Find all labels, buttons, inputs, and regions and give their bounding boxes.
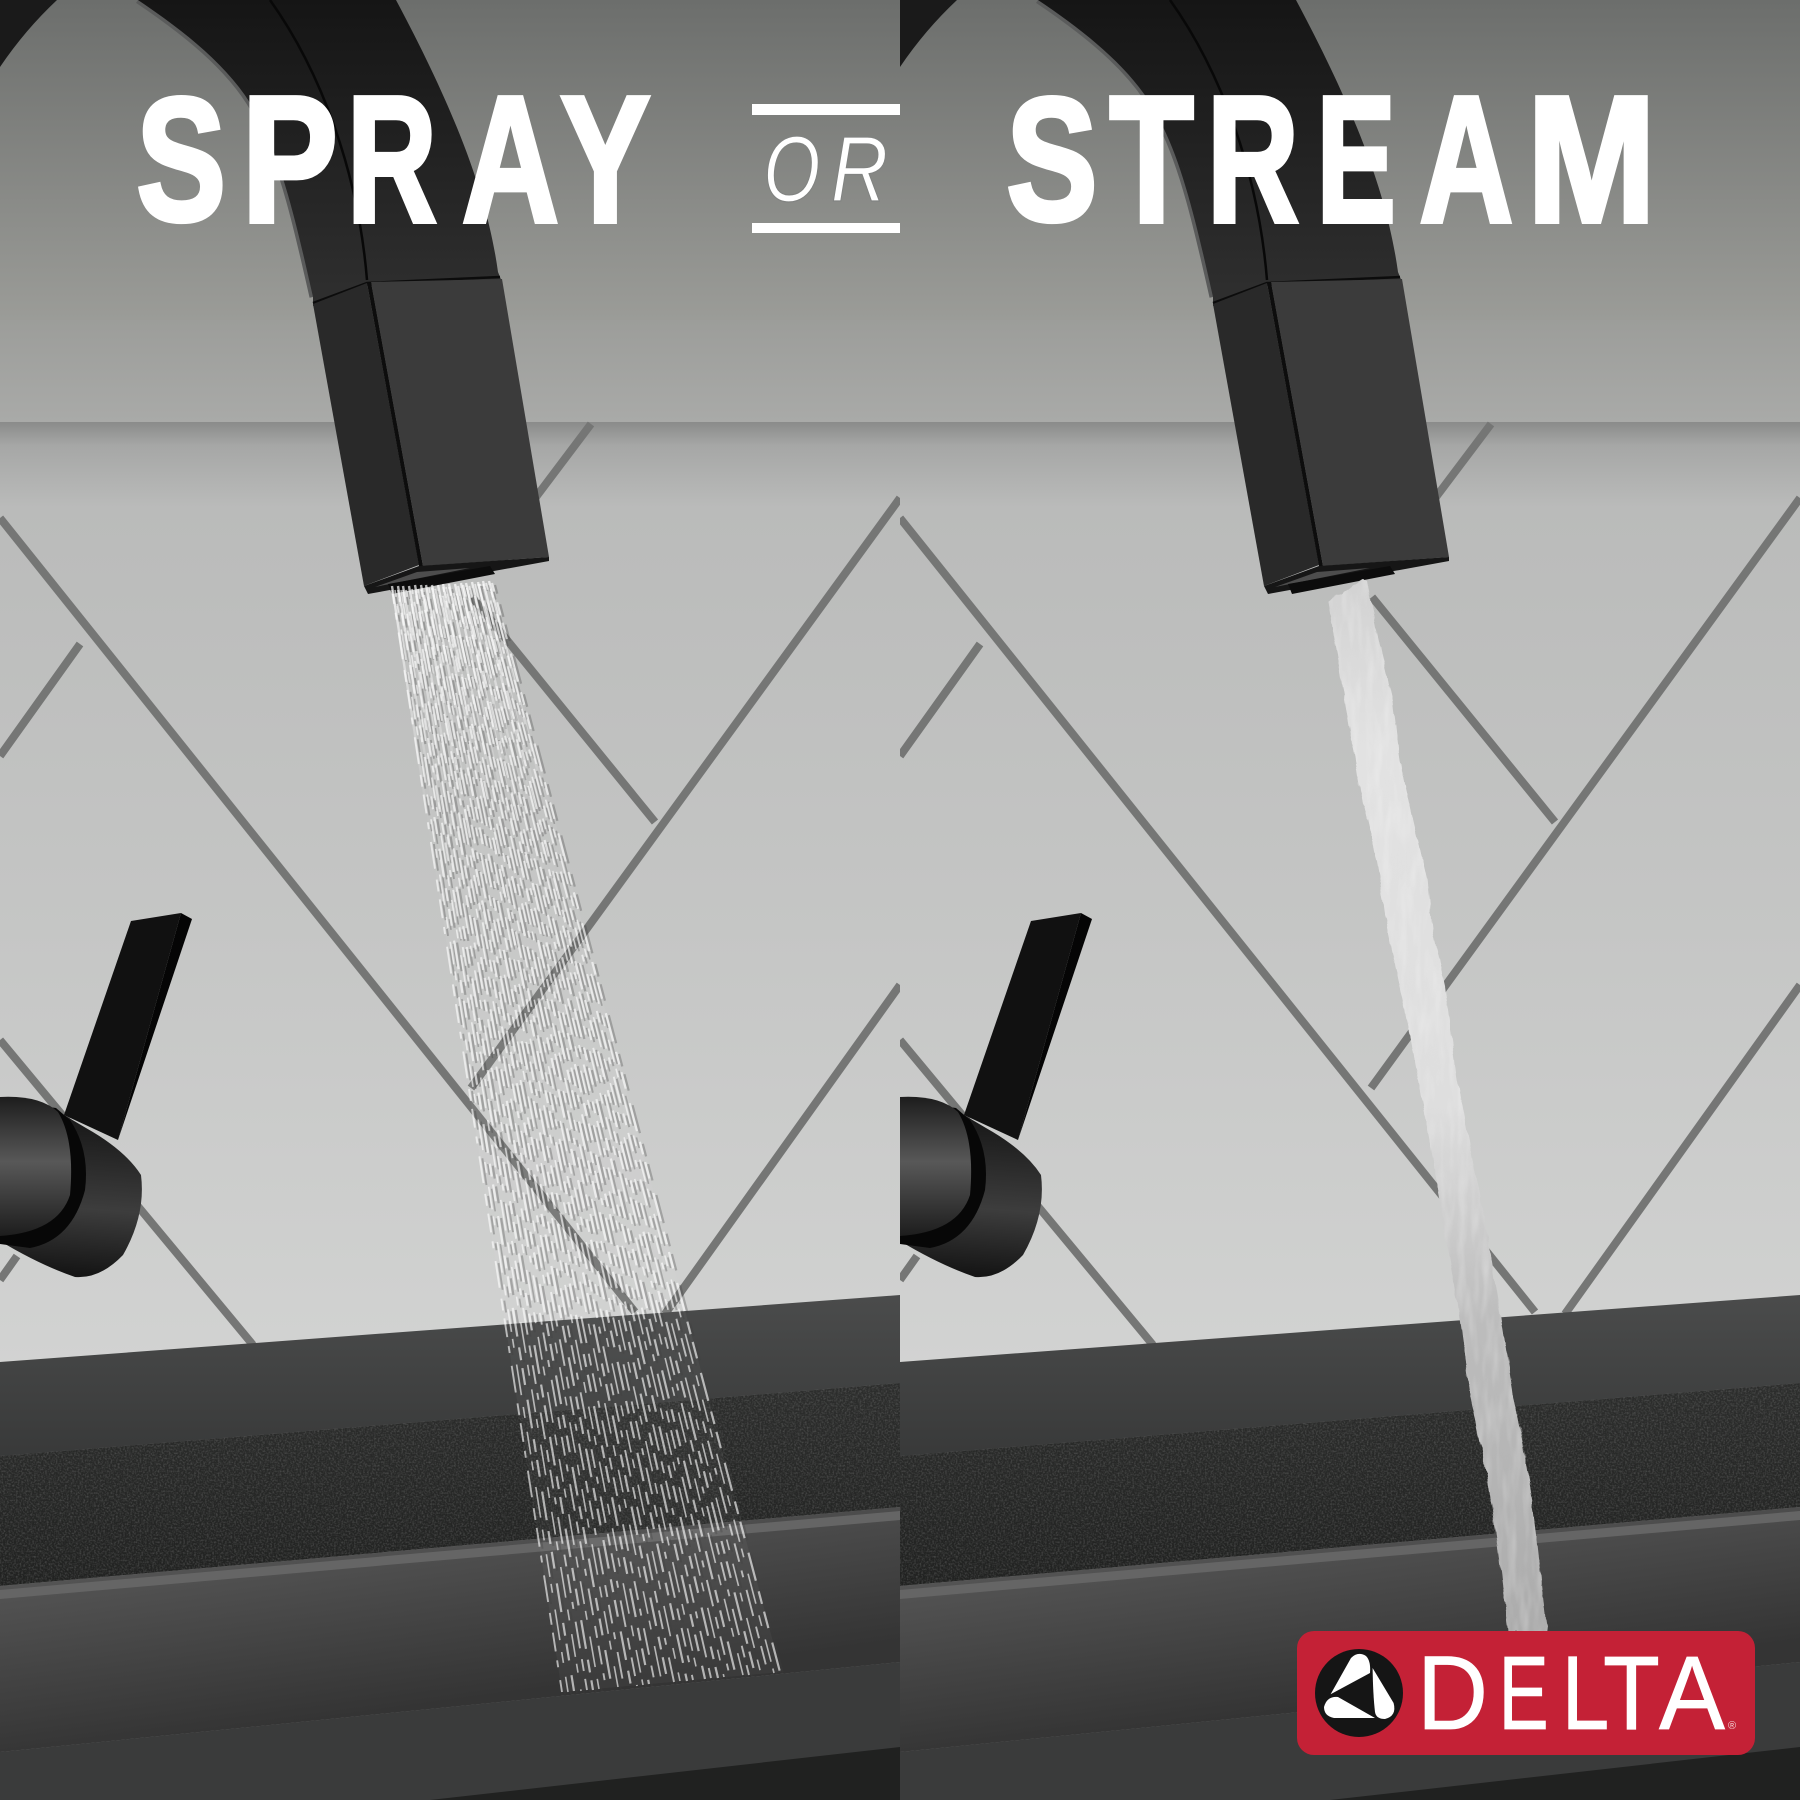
wordmark: D <box>1417 1634 1488 1752</box>
logo: Delta badge <box>1297 1631 1755 1755</box>
heading: OR with rules <box>752 104 900 233</box>
handle barrel <box>900 1115 1042 1277</box>
heading: STREAM <box>1006 59 1656 261</box>
faucet corner arc <box>0 0 57 67</box>
heading: STREAM: R <box>1207 60 1299 261</box>
wordmark: E <box>1498 1635 1549 1752</box>
upper wall <box>900 0 1800 320</box>
front deck <box>900 1662 1800 1800</box>
upper wall <box>0 0 900 320</box>
handle collar ring <box>900 1100 986 1248</box>
heading: STREAM: S <box>1006 63 1098 258</box>
heading: SPRAY: Y <box>560 58 650 260</box>
registered mark: ® <box>1728 1720 1736 1732</box>
counter front edge <box>900 1383 1800 1586</box>
stream water <box>1328 579 1547 1632</box>
heading: SPRAY: S <box>136 63 226 258</box>
countertop <box>900 1295 1800 1456</box>
panel: spray side scene <box>0 0 900 1800</box>
heading: STREAM: E <box>1316 60 1396 260</box>
counter front edge <box>0 1383 900 1586</box>
heading: STREAM: T <box>1110 59 1194 260</box>
faucet spout arc <box>1038 0 1402 306</box>
heading: SPRAY: P <box>242 58 338 260</box>
tiled backsplash <box>900 422 1800 1372</box>
faucet spray head <box>1213 279 1449 594</box>
heading: OR with rules: O <box>764 116 820 221</box>
countertop <box>0 1295 900 1456</box>
faucet spray head <box>313 279 549 594</box>
sink interior <box>0 1507 900 1752</box>
wordmark: T <box>1603 1634 1660 1751</box>
heading: STREAM: M <box>1527 59 1656 260</box>
wall ledge band <box>0 320 900 422</box>
wordmark: A <box>1659 1634 1725 1752</box>
faucet corner arc <box>900 0 957 67</box>
tiled backsplash <box>0 422 900 1372</box>
front deck <box>0 1662 900 1800</box>
icon: Delta triangle emblem <box>1315 1649 1403 1737</box>
handle barrel <box>0 1115 142 1277</box>
herringbone grout lines <box>900 424 1800 1345</box>
handle collar ring <box>0 1100 86 1248</box>
handle hub <box>900 1097 971 1236</box>
handle blade <box>64 913 192 1140</box>
herringbone grout lines <box>0 424 900 1345</box>
heading: SPRAY: A <box>462 58 559 260</box>
sink rim <box>900 1511 1800 1599</box>
heading: STREAM: A <box>1420 60 1513 261</box>
heading: SPRAY: R <box>347 59 437 260</box>
faucet spout arc <box>138 0 502 306</box>
deck dark edge <box>1330 1747 1800 1800</box>
heading: SPRAY <box>136 58 650 260</box>
sink rim <box>0 1511 900 1599</box>
wall ledge band <box>900 320 1800 422</box>
deck dark edge <box>430 1747 900 1800</box>
handle hub <box>0 1097 71 1236</box>
panel: stream side scene <box>900 0 1800 1800</box>
sink interior <box>900 1507 1800 1752</box>
wordmark <box>1417 1634 1725 1752</box>
heading: OR with rules: R <box>831 118 888 222</box>
spray water <box>392 581 783 1694</box>
wordmark: L <box>1562 1635 1609 1752</box>
handle blade <box>964 913 1092 1140</box>
